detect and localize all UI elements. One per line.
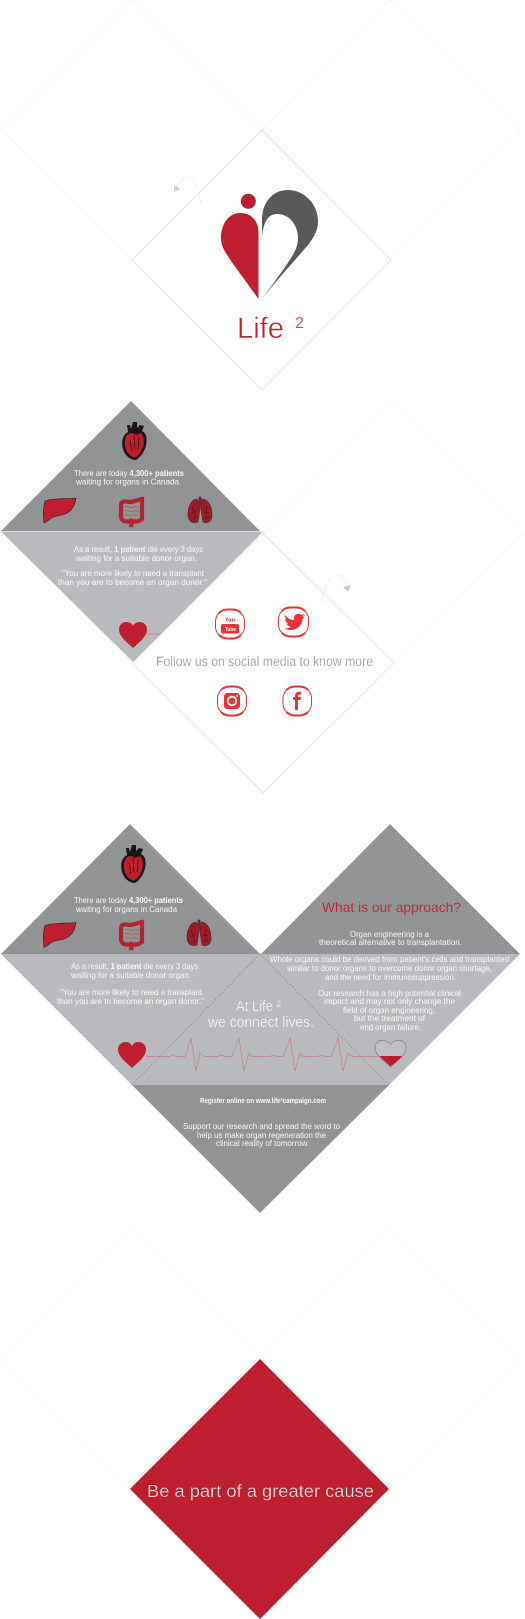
text: organ engineering definition: Organ engineering is a xyxy=(350,929,429,939)
text: follow us: Follow us on social media to know more xyxy=(156,654,373,669)
icon: red heart with line xyxy=(119,622,160,648)
text: consequence and quote lower: As a result, 1 patient die every 3 days xyxy=(71,961,198,971)
text: patients waiting xyxy=(74,468,184,486)
text: patients waiting lower xyxy=(74,895,183,914)
text: be a part of a greater cause: Be a part of a greater cause xyxy=(147,1481,374,1501)
icon: YouTube xyxy=(216,609,244,638)
text: support our research: Support our research and spread the word to xyxy=(183,1121,340,1131)
text: patients waiting lower: waiting for organs in Canada xyxy=(75,904,177,914)
panel: connect lives centre diamond xyxy=(132,954,389,1085)
text: patients waiting: There are today 4,300+ patients xyxy=(74,468,184,478)
icon: YouTube: You xyxy=(225,618,235,624)
panel: consequences triangle xyxy=(1,532,263,662)
icon: Instagram xyxy=(218,686,246,716)
text: consequence and quote: than you are to become an organ donor." xyxy=(58,577,207,587)
panel: logo diamond xyxy=(132,130,391,390)
text: organ engineering definition xyxy=(319,929,462,947)
icon: Twitter xyxy=(278,607,308,636)
icon: intestine xyxy=(121,499,142,527)
icon: nearly empty heart xyxy=(375,1040,406,1067)
panel: patients waiting triangle xyxy=(1,401,260,531)
text: At Life 2 we connect lives: we connect lives. xyxy=(207,1014,314,1031)
text: research impact: Our research has a high potential clinical xyxy=(318,988,461,998)
text: patients waiting lower: There are today 4,300+ patients xyxy=(74,895,183,905)
text: consequence and quote lower: than you are to become an organ donor." xyxy=(57,996,204,1006)
text: consequence and quote lower: waiting for a suitable donor organ. xyxy=(70,970,191,980)
panel: social media diamond xyxy=(132,533,394,793)
text: support our research: clinical reality of tomorrow. xyxy=(216,1138,309,1148)
text: organ engineering definition: theoretical alternative to transplantation. xyxy=(319,937,462,947)
text: consequence and quote xyxy=(58,544,207,587)
title: Life 2: 2 xyxy=(295,315,304,332)
text: consequence and quote lower: "You are more likely to need a transplant xyxy=(60,987,203,997)
icon: lungs xyxy=(188,497,212,523)
text: research impact xyxy=(318,988,461,1032)
panel: consequences triangle lower xyxy=(1,954,260,1085)
text: patients waiting: waiting for organs in Canada xyxy=(75,476,179,486)
panel: call to action diamond xyxy=(130,1359,389,1619)
panel: faint outline diamond section two xyxy=(263,403,525,663)
arrow: curved left arrow xyxy=(174,177,200,203)
text: research impact: impact and may not only change the xyxy=(324,996,455,1006)
panel: approach triangle xyxy=(261,824,520,954)
panel: register triangle xyxy=(132,1085,389,1213)
icon: liver lower xyxy=(43,922,76,948)
arrow: curved right arrow xyxy=(322,575,351,603)
text: consequence and quote: As a result, 1 patient die every 3 days xyxy=(74,544,203,554)
text: whole organs: similar to donor organs to overcome donor organ shortage, xyxy=(287,963,492,973)
text: support our research: help us make organ regeneration the xyxy=(197,1130,326,1140)
title: Life 2: Life xyxy=(237,312,284,345)
chart: heartbeat line xyxy=(146,1038,378,1071)
text: consequence and quote: waiting for a suitable donor organ. xyxy=(75,553,197,563)
icon: heart organ lower xyxy=(121,845,146,883)
panel: patients waiting triangle lower xyxy=(1,824,260,954)
icon: Life 2 logo xyxy=(221,190,318,299)
text: At Life 2 we connect lives: At Life ² xyxy=(236,998,281,1015)
text: support our research xyxy=(183,1121,340,1148)
icon: YouTube: Tube xyxy=(225,627,236,633)
text: whole organs: Whole organs could be derived from patient's cells and transplanted xyxy=(270,954,509,964)
panel: faint outline diamonds bottom xyxy=(0,1228,519,1489)
icon: Facebook xyxy=(283,686,312,716)
text: whole organs xyxy=(270,954,509,982)
text: consequence and quote lower xyxy=(57,961,204,1006)
text: research impact: end organ failure. xyxy=(360,1022,421,1032)
icon: lungs lower xyxy=(187,920,211,946)
text: At Life 2 we connect lives xyxy=(207,998,314,1031)
icon: liver xyxy=(43,498,76,523)
panel: organ engineering triangle xyxy=(260,954,520,1085)
text: register online: Register online on www.life²campaign.com xyxy=(200,1098,326,1105)
icon: intestine lower xyxy=(121,922,142,950)
icon: heart organ xyxy=(122,422,147,460)
dashed fold lines xyxy=(132,954,389,1085)
text: consequence and quote: "You are more likely to need a transplant xyxy=(62,568,205,578)
text: research impact: field of organ engineering, xyxy=(343,1005,435,1015)
heading: what is our approach: What is our approach? xyxy=(322,899,461,915)
panel: faint outline diamonds top xyxy=(2,0,520,260)
text: research impact: but the treatment of xyxy=(354,1013,426,1023)
text: whole organs: and the need for immunosuppression. xyxy=(325,972,456,982)
icon: full red heart xyxy=(118,1042,146,1068)
